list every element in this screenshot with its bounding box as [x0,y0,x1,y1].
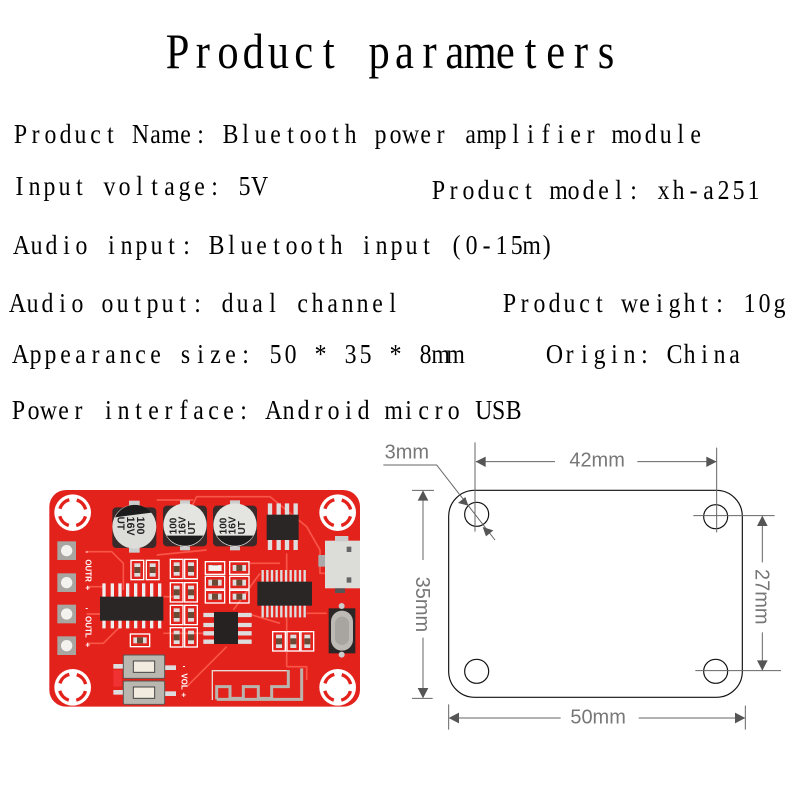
3mm callout [383,441,495,540]
capacitors: UT [237,521,248,534]
push buttons [113,655,176,704]
chip: right SOP20 [257,570,312,617]
mounting holes [54,494,356,706]
27mm dimension: 27mm [750,569,772,625]
micro USB connector [318,536,360,593]
3mm callout: 3mm [385,441,429,463]
silkscreen labels: - [183,662,186,671]
PCB antenna [212,668,302,700]
50mm dimension: 50mm [570,707,626,729]
silkscreen labels: - [85,547,88,556]
silkscreen labels: + [85,640,90,649]
extension lines [412,442,781,730]
capacitors: 16V [124,517,136,537]
parameter: power interface: Power interface: Android micro USB [12,395,522,425]
parameter: audio output: Audio output: dual channel [9,288,396,318]
parameter: product weight: Product weight: 10g [503,288,786,318]
27mm dimension [750,516,772,671]
crystal [329,603,355,658]
output pads [57,541,76,655]
35mm dimension: 35mm [411,577,433,632]
chip: large SOP16 [100,583,163,628]
mechanical dimension diagram [383,441,781,730]
board [49,490,360,707]
42mm dimension [476,449,717,471]
parameter: appearance size: Appearance size: 50 * 35 * 8mm [12,339,465,369]
capacitors: 100 [218,517,229,534]
silkscreen labels: + [85,584,90,593]
capacitors [112,500,257,553]
35mm dimension [411,490,433,698]
silkscreen labels [83,547,188,699]
chip: top right SOP8 [267,503,299,550]
50mm dimension [449,707,745,729]
photo: red Bluetooth amplifier circuit board [49,490,360,707]
silkscreen labels: OUTL [83,616,92,638]
capacitors: UT [187,521,198,534]
parameter: input voltage: Input voltage: 5V [16,171,269,201]
capacitors: 16V [228,516,239,534]
silkscreen labels: + [181,690,186,699]
capacitors: UT [115,517,126,530]
chip: center SOP8 [203,612,252,644]
capacitors: 100 [168,517,179,534]
42mm dimension: 42mm [569,449,625,471]
parameter: product name: Product Name: Bluetooth power amplifier module [14,119,701,149]
capacitors: 16V [178,516,189,534]
capacitors: 100 [134,517,146,535]
small SMD components [130,559,314,651]
silkscreen labels: OUTR [83,559,92,582]
mounting holes [465,502,728,683]
parameter: product model: Product model: xh-a251 [432,175,760,205]
title: Product parameters [166,25,614,80]
board outline [449,490,742,697]
parameter: audio input: Audio input: Bluetooth input (0-15m) [13,230,551,260]
parameter: origin: Origin: China [546,339,740,369]
silkscreen labels: - [85,604,88,613]
silkscreen labels: VOL [179,673,188,690]
